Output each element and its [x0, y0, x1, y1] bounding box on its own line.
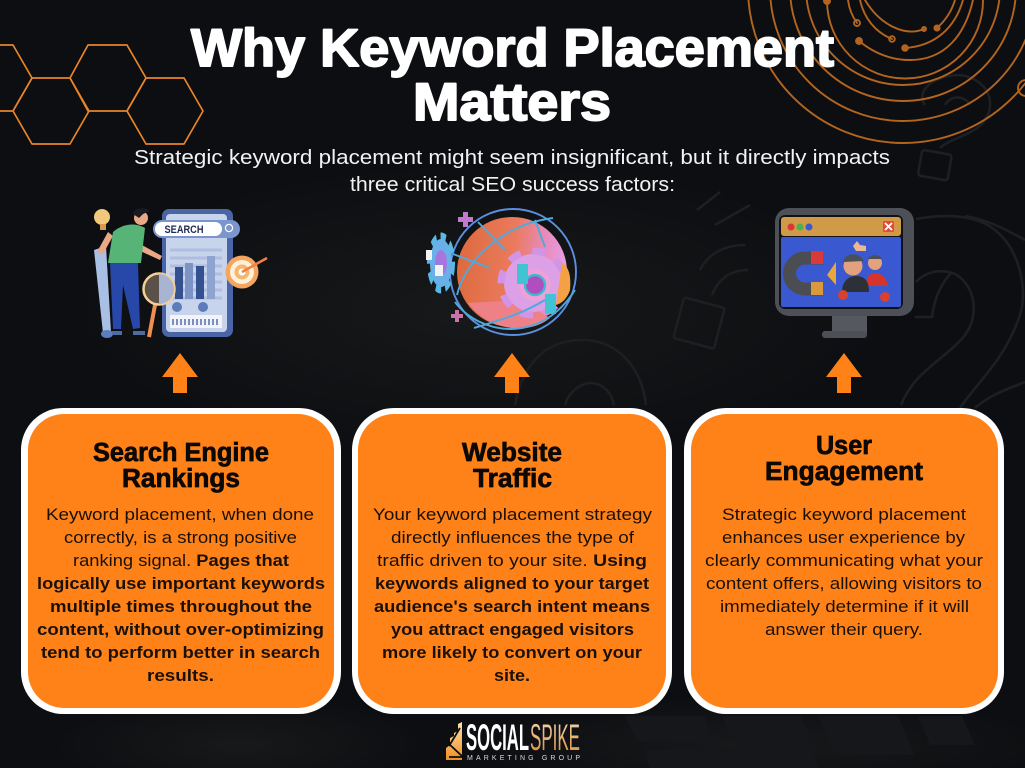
- text: rankings body: multiple times throughout the: [50, 597, 312, 616]
- text: engagement body: enhances user experience by: [722, 528, 966, 547]
- icon: monitor with magnet and people: [775, 208, 914, 338]
- heading: user engagement: [765, 432, 924, 486]
- heading: search engine rankings: [93, 439, 269, 493]
- icon: person with search phone: SEARCH: [164, 224, 204, 236]
- text: rankings body: logically use important keywords: [37, 574, 325, 593]
- text: rankings body: [37, 505, 325, 685]
- text: engagement body: content offers, allowing visitors to: [706, 574, 982, 593]
- heading: search engine rankings: Search Engine: [93, 439, 269, 467]
- text: traffic body: Your keyword placement strategy: [373, 505, 653, 524]
- title: [191, 19, 834, 132]
- text: traffic body: traffic driven to your site. Using: [377, 551, 647, 570]
- panel: search engine rankings: [21, 408, 341, 714]
- heading: website traffic: Traffic: [473, 465, 552, 493]
- text: rankings body: content, without over-optimizing: [37, 620, 324, 639]
- text: rankings body: tend to perform better in search: [41, 643, 320, 662]
- text: traffic body: you attract engaged visitors: [391, 620, 634, 639]
- subtitle: Strategic keyword placement might seem insignificant, but it directly impacts: [134, 147, 890, 169]
- subtitle: [134, 147, 890, 196]
- title: Matters: [413, 73, 611, 132]
- logo: Social Spike Marketing Group: SOCIAL: [466, 717, 529, 758]
- text: SPIKE: [530, 717, 580, 758]
- heading: user engagement: Engagement: [765, 458, 924, 486]
- decoration: concentric circuit circles: [748, 0, 1025, 143]
- text: engagement body: Strategic keyword placement: [722, 505, 966, 524]
- text: engagement body: clearly communicating what your: [705, 551, 983, 570]
- panel: user engagement: [684, 408, 1004, 714]
- title: Why Keyword Placement: [191, 19, 834, 78]
- logo: Social Spike Marketing Group: [446, 717, 580, 762]
- arrow: to engagement icon: [826, 353, 862, 393]
- text: rankings body: results.: [147, 666, 214, 685]
- text: rankings body: correctly, is a strong positive: [64, 528, 297, 547]
- text: engagement body: immediately determine if it will: [720, 597, 969, 616]
- text: traffic body: more likely to convert on your: [382, 643, 642, 662]
- text: engagement body: [705, 505, 983, 639]
- text: traffic body: [373, 505, 653, 685]
- icon: globe with gears: [426, 209, 576, 335]
- heading: user engagement: User: [816, 432, 872, 460]
- text: rankings body: Keyword placement, when done: [46, 505, 314, 524]
- text: engagement body: answer their query.: [765, 620, 923, 639]
- text: traffic body: directly influences the type of: [391, 528, 634, 547]
- heading: website traffic: [462, 439, 562, 493]
- text: traffic body: site.: [494, 666, 530, 685]
- subtitle: three critical SEO success factors:: [350, 174, 675, 196]
- panel: website traffic: [352, 408, 672, 714]
- heading: search engine rankings: Rankings: [122, 465, 240, 493]
- text: rankings body: ranking signal. Pages that: [73, 551, 289, 570]
- logo: Social Spike Marketing Group: MARKETING GROUP: [467, 755, 580, 762]
- arrow: to rankings icon: [162, 353, 198, 393]
- decoration: hexagon outlines: [0, 45, 203, 144]
- text: traffic body: keywords aligned to your target: [375, 574, 649, 593]
- icon: person with search phone: [94, 208, 267, 338]
- text: traffic body: audience's search intent means: [374, 597, 650, 616]
- heading: website traffic: Website: [462, 439, 562, 467]
- arrow: to traffic icon: [494, 353, 530, 393]
